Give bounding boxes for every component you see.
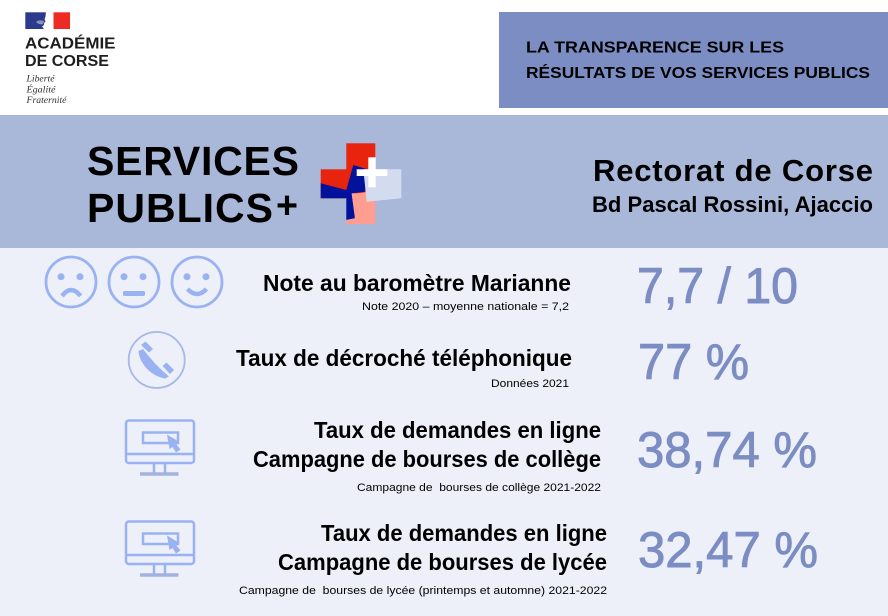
banner heading — [526, 40, 870, 82]
metric label: Campagne de bourses de collège — [253, 446, 601, 472]
metric value: 7,7 / 10 — [637, 258, 798, 314]
metric label: Taux de demandes en ligne — [314, 417, 601, 443]
motto: Liberté — [25, 75, 55, 85]
banner heading: RÉSULTATS DE VOS SERVICES PUBLICS — [526, 63, 870, 82]
logo name: ACADÉMIE — [25, 33, 116, 52]
title: Services Publics+: PUBLICS — [87, 185, 273, 231]
metric label: Taux de demandes en ligne — [321, 520, 607, 546]
logo name — [25, 33, 116, 70]
metric value: 38,74 % — [637, 422, 817, 478]
metric note: Note 2020 – moyenne nationale = 7,2 — [362, 301, 569, 313]
title: Services Publics+ — [87, 138, 299, 231]
metric label — [278, 520, 607, 575]
metric label: Campagne de bourses de lycée — [278, 549, 607, 575]
icon: Marianne flag — [25, 12, 70, 29]
logo: Académie de Corse — [25, 12, 116, 106]
panel: services publics band — [0, 115, 888, 248]
row: online requests, collège — [253, 417, 817, 494]
row: Marianne barometer — [263, 258, 798, 314]
metric label: Note au baromètre Marianne — [263, 270, 571, 296]
icon: neutral face — [109, 257, 159, 307]
motto — [25, 75, 67, 106]
metric label: Taux de décroché téléphonique — [236, 345, 572, 371]
location heading: Rectorat de Corse — [593, 153, 873, 188]
metric note: Données 2021 — [491, 378, 569, 390]
title: Services Publics+: SERVICES — [87, 138, 299, 184]
row: online requests, lycée — [239, 520, 818, 597]
icon: colourful plus logo — [321, 143, 401, 224]
motto: Égalité — [25, 84, 56, 96]
icon: telephone — [129, 332, 185, 388]
banner heading: LA TRANSPARENCE SUR LES — [526, 40, 784, 56]
metric label — [253, 417, 601, 472]
metric value: 77 % — [638, 334, 749, 390]
row: telephone pick-up rate — [236, 334, 749, 390]
metric note: Campagne de bourses de lycée (printemps et automne) 2021-2022 — [239, 585, 607, 597]
location heading: Bd Pascal Rossini, Ajaccio — [592, 192, 873, 217]
icon: computer monitor (collège) — [126, 420, 194, 474]
motto: Fraternité — [25, 96, 67, 106]
title: Services Publics+: + — [276, 185, 298, 227]
metric value: 32,47 % — [638, 522, 818, 578]
metric note: Campagne de bourses de collège 2021-2022 — [357, 482, 601, 494]
icon: happy face — [172, 257, 222, 307]
panel: transparency banner — [499, 12, 888, 108]
icon: sad face — [46, 257, 96, 307]
location heading — [592, 153, 873, 217]
icon: computer monitor (lycée) — [126, 522, 194, 575]
logo name: DE CORSE — [25, 53, 109, 70]
